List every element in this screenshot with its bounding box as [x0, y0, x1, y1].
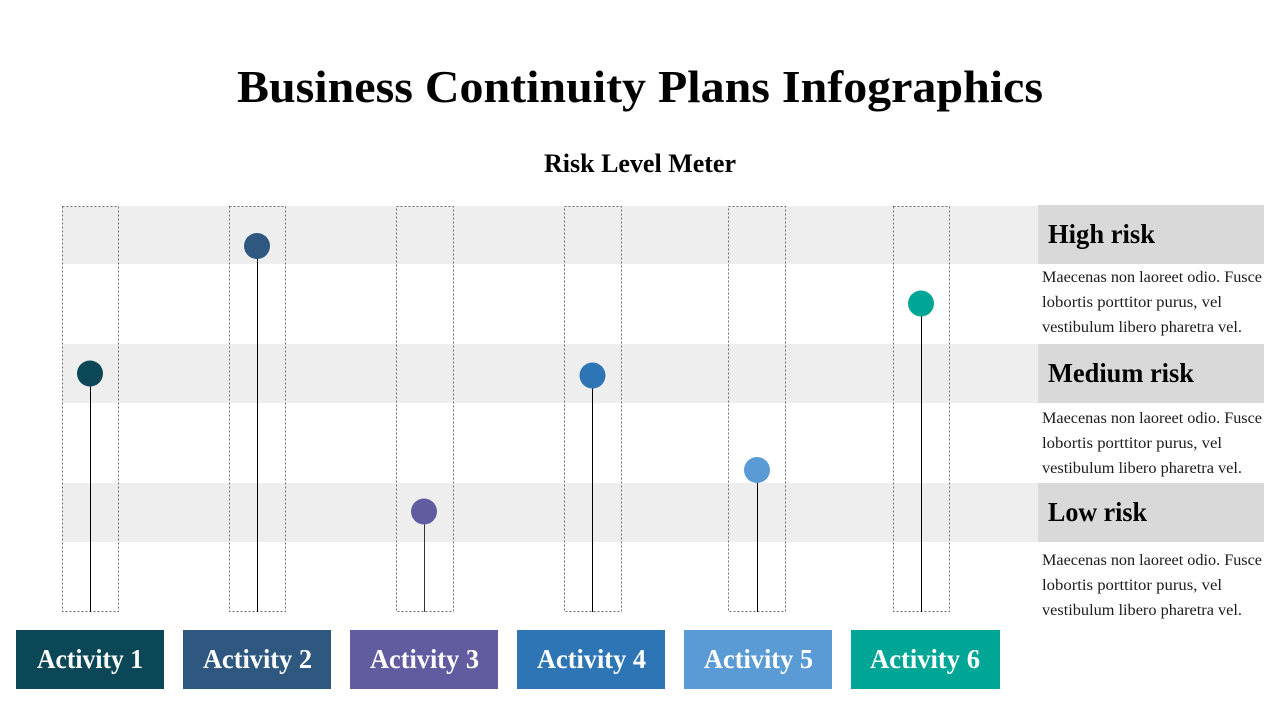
button: activity 4: Activity 4 [537, 644, 646, 674]
panel: medium risk [1038, 344, 1264, 477]
button: activity 3: Activity 3 [370, 644, 479, 674]
text: low risk description [1042, 552, 1262, 619]
panel: high risk [1038, 205, 1264, 336]
marker: activity 6, between high and medium [908, 290, 934, 612]
heading: medium risk: Medium risk [1048, 358, 1194, 388]
text: medium risk description: Maecenas non laoreet odio. Fusce [1042, 410, 1262, 427]
text: high risk description [1042, 269, 1262, 336]
marker: activity 3, low risk [411, 498, 437, 612]
text: medium risk description: vestibulum libero pharetra vel. [1042, 460, 1242, 477]
button: activity 2: Activity 2 [203, 644, 312, 674]
heading: high risk [1038, 205, 1264, 264]
button: activity 1: Activity 1 [37, 644, 143, 674]
button: activity 1 [16, 630, 164, 689]
text: medium risk description [1042, 410, 1262, 477]
text: low risk description: vestibulum libero pharetra vel. [1042, 602, 1242, 619]
button: activity 2 [183, 630, 331, 689]
column frame: activity 3 [396, 206, 454, 612]
button: activity 6: Activity 6 [870, 644, 980, 674]
heading: medium risk [1038, 344, 1264, 403]
button: activity 5: Activity 5 [704, 644, 813, 674]
marker: activity 2, high risk [244, 233, 270, 612]
column frame: activity 6 [894, 206, 950, 612]
band: medium risk [62, 344, 1038, 403]
panel: low risk [1038, 483, 1264, 619]
column frame: activity 2 [230, 206, 286, 612]
band: high risk [62, 206, 1038, 264]
column frame: activity 5 [728, 206, 786, 612]
button: activity 5 [684, 630, 832, 689]
text: low risk description: lobortis porttitor purus, vel [1042, 577, 1222, 594]
heading: low risk [1038, 483, 1264, 542]
subtitle: Risk Level Meter [544, 149, 736, 178]
marker: activity 5, between medium and low [744, 457, 770, 612]
text: high risk description: Maecenas non laoreet odio. Fusce [1042, 269, 1262, 286]
text: high risk description: lobortis porttitor purus, vel [1042, 294, 1222, 311]
button: activity 3 [350, 630, 498, 689]
heading: high risk: High risk [1048, 219, 1155, 249]
text: high risk description: vestibulum libero pharetra vel. [1042, 319, 1242, 336]
marker: activity 1, medium risk [77, 360, 103, 612]
text: medium risk description: lobortis porttitor purus, vel [1042, 435, 1222, 452]
button: activity 6 [851, 630, 1000, 689]
column frame: activity 4 [564, 206, 622, 612]
text: low risk description: Maecenas non laoreet odio. Fusce [1042, 552, 1262, 569]
button: activity 4 [517, 630, 665, 689]
band: low risk [62, 483, 1038, 542]
column frame: activity 1 [62, 206, 118, 612]
heading: low risk: Low risk [1048, 497, 1147, 527]
marker: activity 4, medium risk [580, 362, 606, 612]
title: Business Continuity Plans Infographics [237, 61, 1043, 112]
